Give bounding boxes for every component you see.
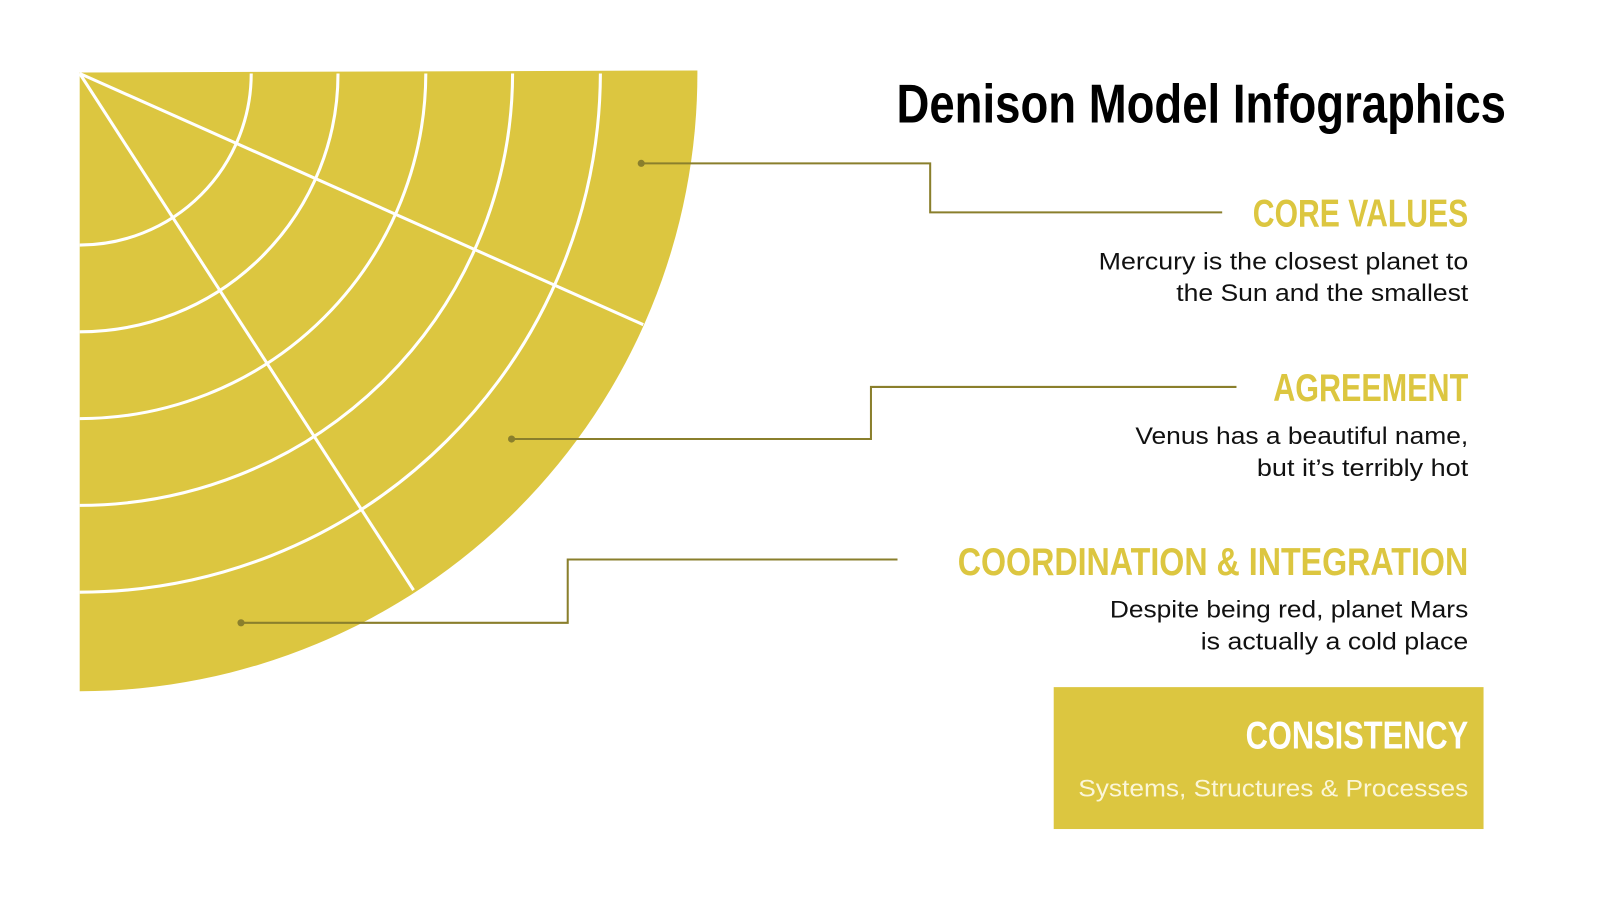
block: coordination: is actually a cold place bbox=[1201, 628, 1468, 655]
block: coordination: COORDINATION & INTEGRATION bbox=[958, 541, 1468, 584]
block: coordination bbox=[958, 541, 1468, 655]
block: agreement: AGREEMENT bbox=[1273, 367, 1468, 410]
connector: coordination bbox=[237, 560, 898, 626]
block: core values: Mercury is the closest planet to bbox=[1099, 249, 1468, 276]
connector: core values bbox=[638, 160, 1222, 212]
block: core values: CORE VALUES bbox=[1253, 193, 1468, 236]
block: agreement: but it’s terribly hot bbox=[1257, 455, 1468, 482]
block: agreement bbox=[1135, 367, 1468, 482]
block: core values bbox=[1099, 193, 1468, 307]
box: consistency: Systems, Structures & Processes bbox=[1078, 775, 1468, 802]
connector: agreement bbox=[508, 387, 1236, 443]
block: agreement: Venus has a beautiful name, bbox=[1135, 423, 1468, 450]
box: consistency: CONSISTENCY bbox=[1246, 714, 1468, 757]
block: core values: the Sun and the smallest bbox=[1176, 280, 1468, 307]
box: consistency bbox=[1054, 687, 1484, 829]
block: coordination: Despite being red, planet Mars bbox=[1110, 597, 1468, 624]
quarter circle chart bbox=[80, 70, 697, 691]
